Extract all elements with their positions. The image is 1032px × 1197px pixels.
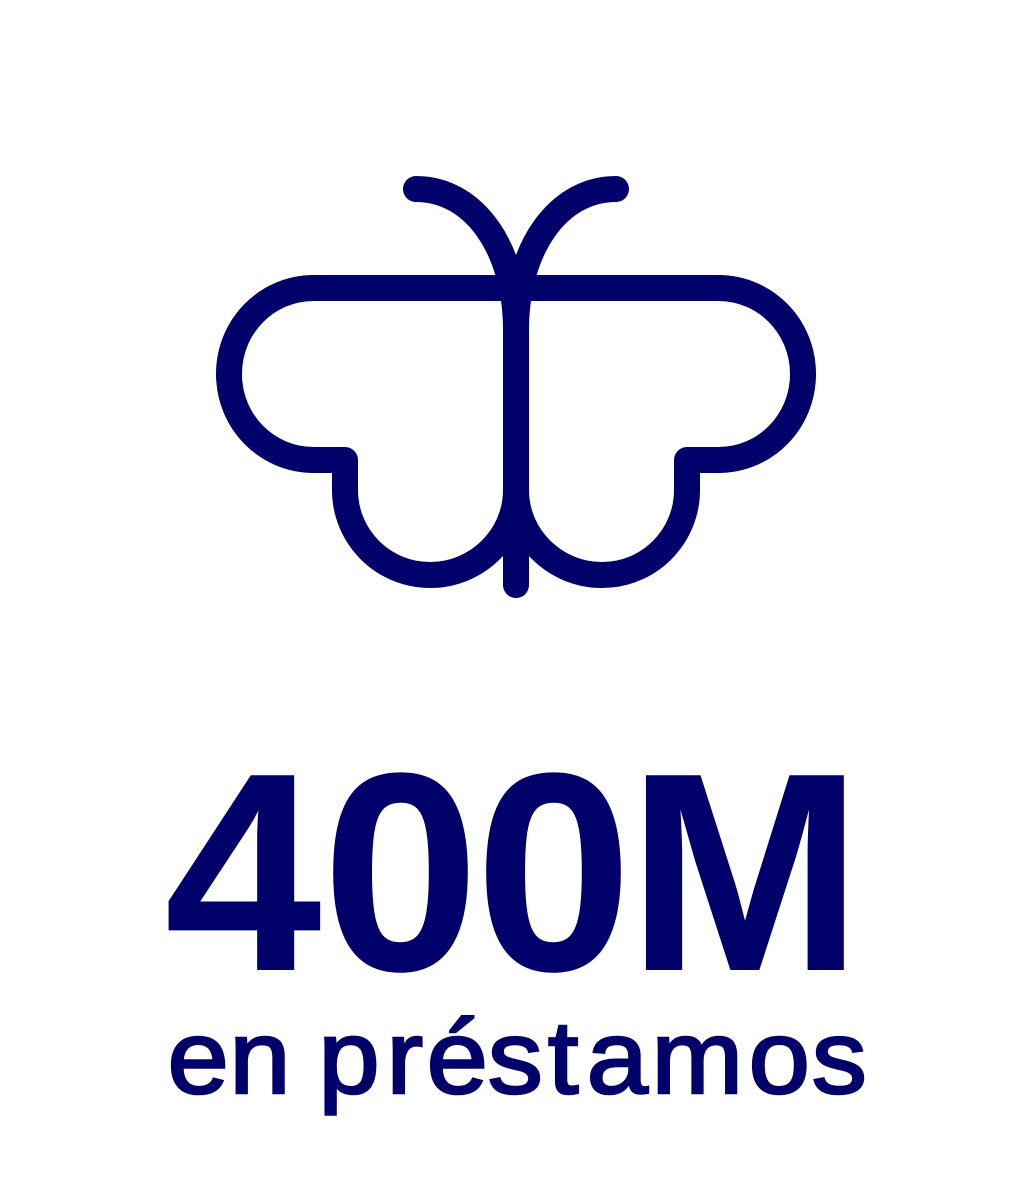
icon: butterfly bbox=[229, 189, 803, 585]
stat caption: en préstamos bbox=[167, 999, 867, 1115]
stat number: 400M bbox=[164, 714, 863, 1030]
